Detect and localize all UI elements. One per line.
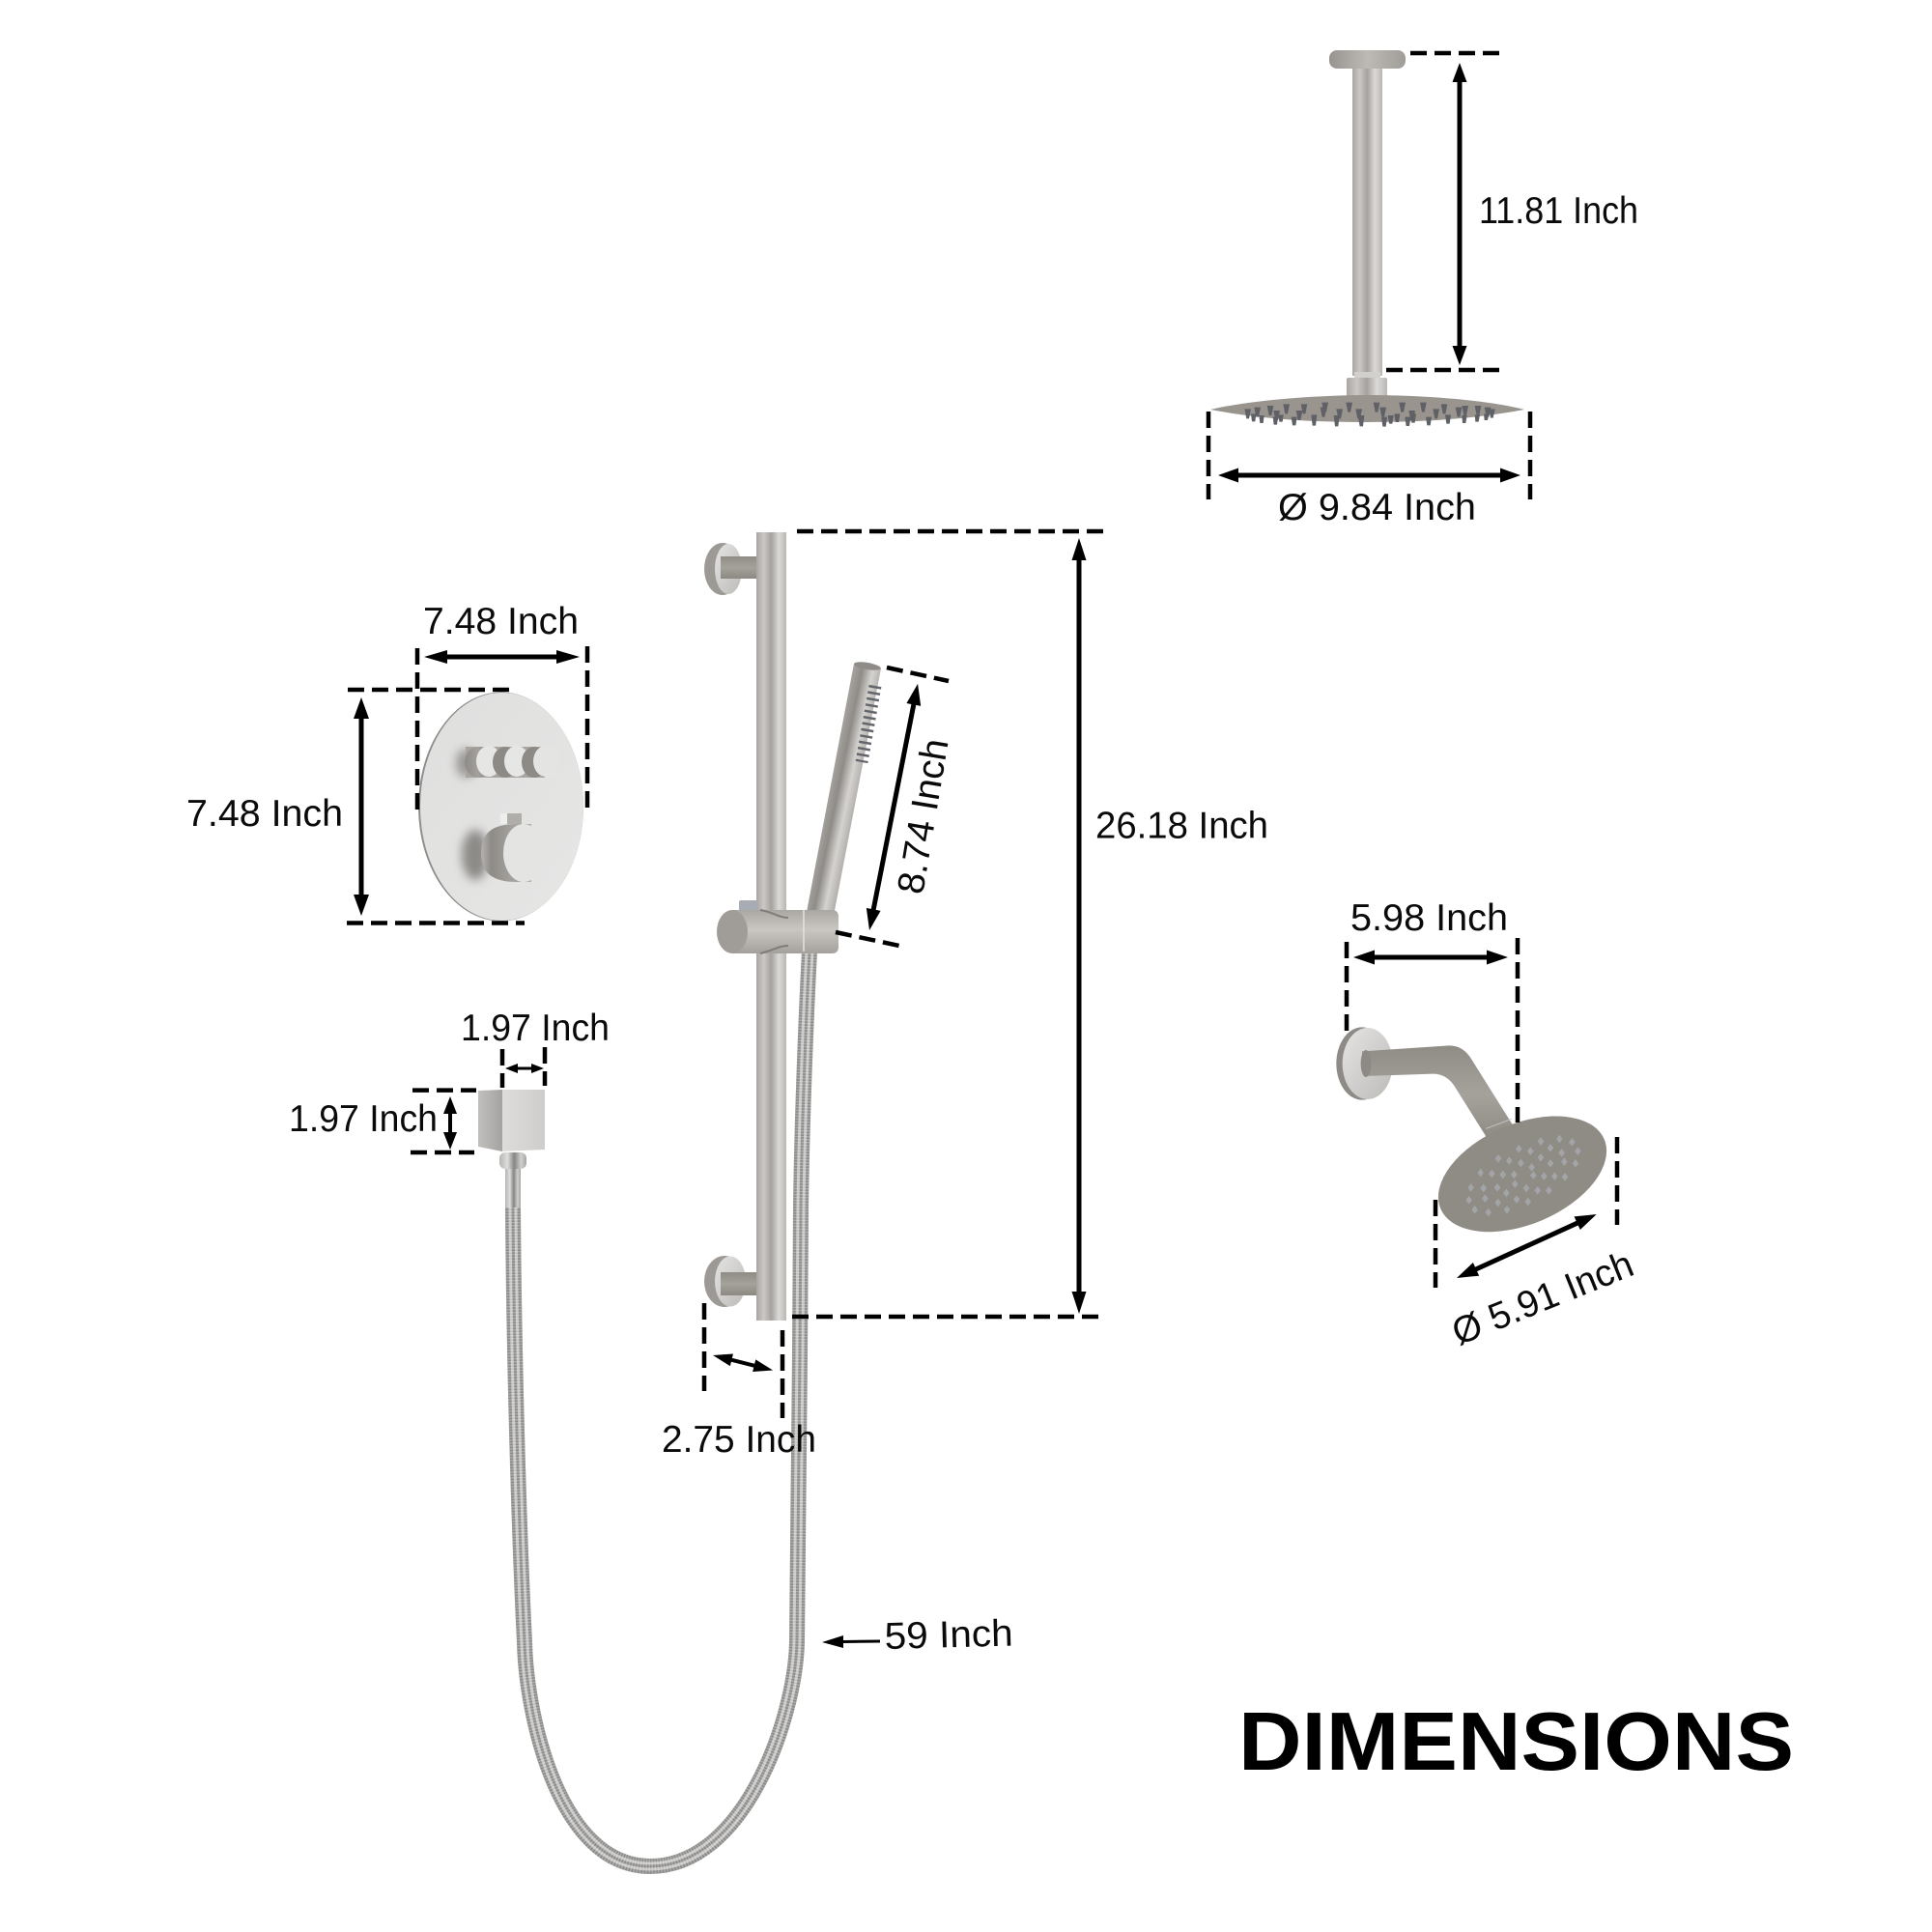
dimension guides: rain head diameter — [1208, 412, 1530, 499]
icon: hand shower wand — [807, 661, 881, 916]
arrow: bracket depth — [711, 1350, 775, 1377]
label: arm height: 11.81 Inch — [1479, 190, 1638, 232]
dimension guides: head diameter — [1435, 1137, 1617, 1288]
icon: shower arm and head — [1336, 1027, 1624, 1255]
icon: round trim plate with knobs — [418, 692, 583, 922]
arrow: plate width — [424, 650, 580, 664]
label: plate height: 7.48 Inch — [186, 793, 343, 835]
arrow: rain head diameter — [1218, 468, 1520, 483]
label: plate width: 7.48 Inch — [423, 601, 579, 642]
dimension guides: plate width and height — [347, 646, 587, 923]
label: rain head diameter: Ø 9.84 Inch — [1278, 487, 1476, 528]
arrow: plate height — [354, 697, 369, 916]
label: rail height: 26.18 Inch — [1095, 806, 1268, 846]
icon: wall bracket top — [704, 543, 757, 595]
icon: ceiling arm and rain head — [1210, 50, 1524, 427]
icon: wall bracket bottom — [704, 1256, 757, 1307]
dimension guides: arm reach — [1347, 938, 1518, 1122]
arrow: ceiling arm height — [1453, 63, 1466, 365]
panel: wall supply elbow — [289, 1008, 610, 1208]
icon: square elbow and connector — [478, 1090, 545, 1208]
label: arm reach: 5.98 Inch — [1350, 897, 1508, 939]
dimension guides: rail height — [792, 531, 1103, 1317]
panel: ceiling rain shower — [1208, 50, 1638, 528]
dimension guides: bracket depth — [704, 1303, 782, 1418]
arrow: rail height — [1072, 538, 1086, 1314]
title: DIMENSIONS — [1238, 1696, 1794, 1788]
panel: thermostatic valve trim plate — [186, 601, 587, 923]
arrow: head diameter — [1454, 1208, 1600, 1285]
panel: slide bar with hand shower — [662, 531, 1268, 1461]
label: elbow height: 1.97 Inch — [289, 1098, 438, 1140]
panel: wall-mounted shower head — [1336, 897, 1639, 1353]
label: bracket depth: 2.75 Inch — [662, 1419, 816, 1461]
icon: slide rail — [756, 532, 786, 1321]
arrow: hand shower length — [863, 682, 924, 931]
dimension guides: elbow width and height — [411, 1047, 545, 1152]
label: elbow width: 1.97 Inch — [461, 1008, 610, 1049]
label: hose length: 59 Inch — [884, 1613, 1013, 1658]
arrow: elbow width — [505, 1064, 544, 1073]
dimension guides: hand shower length — [836, 668, 949, 946]
panel: hose — [513, 952, 1013, 1866]
label: hand shower length: 8.74 Inch — [890, 736, 957, 896]
arrow: elbow height — [443, 1096, 457, 1150]
dimension guides: ceiling arm height — [1386, 53, 1499, 370]
icon: slider holder — [717, 900, 838, 953]
arrow: arm reach — [1353, 951, 1508, 964]
arrow: hose pointer — [822, 1635, 880, 1648]
label: head diameter: Ø 5.91 Inch — [1446, 1243, 1639, 1353]
icon: flexible hose — [513, 952, 810, 1866]
